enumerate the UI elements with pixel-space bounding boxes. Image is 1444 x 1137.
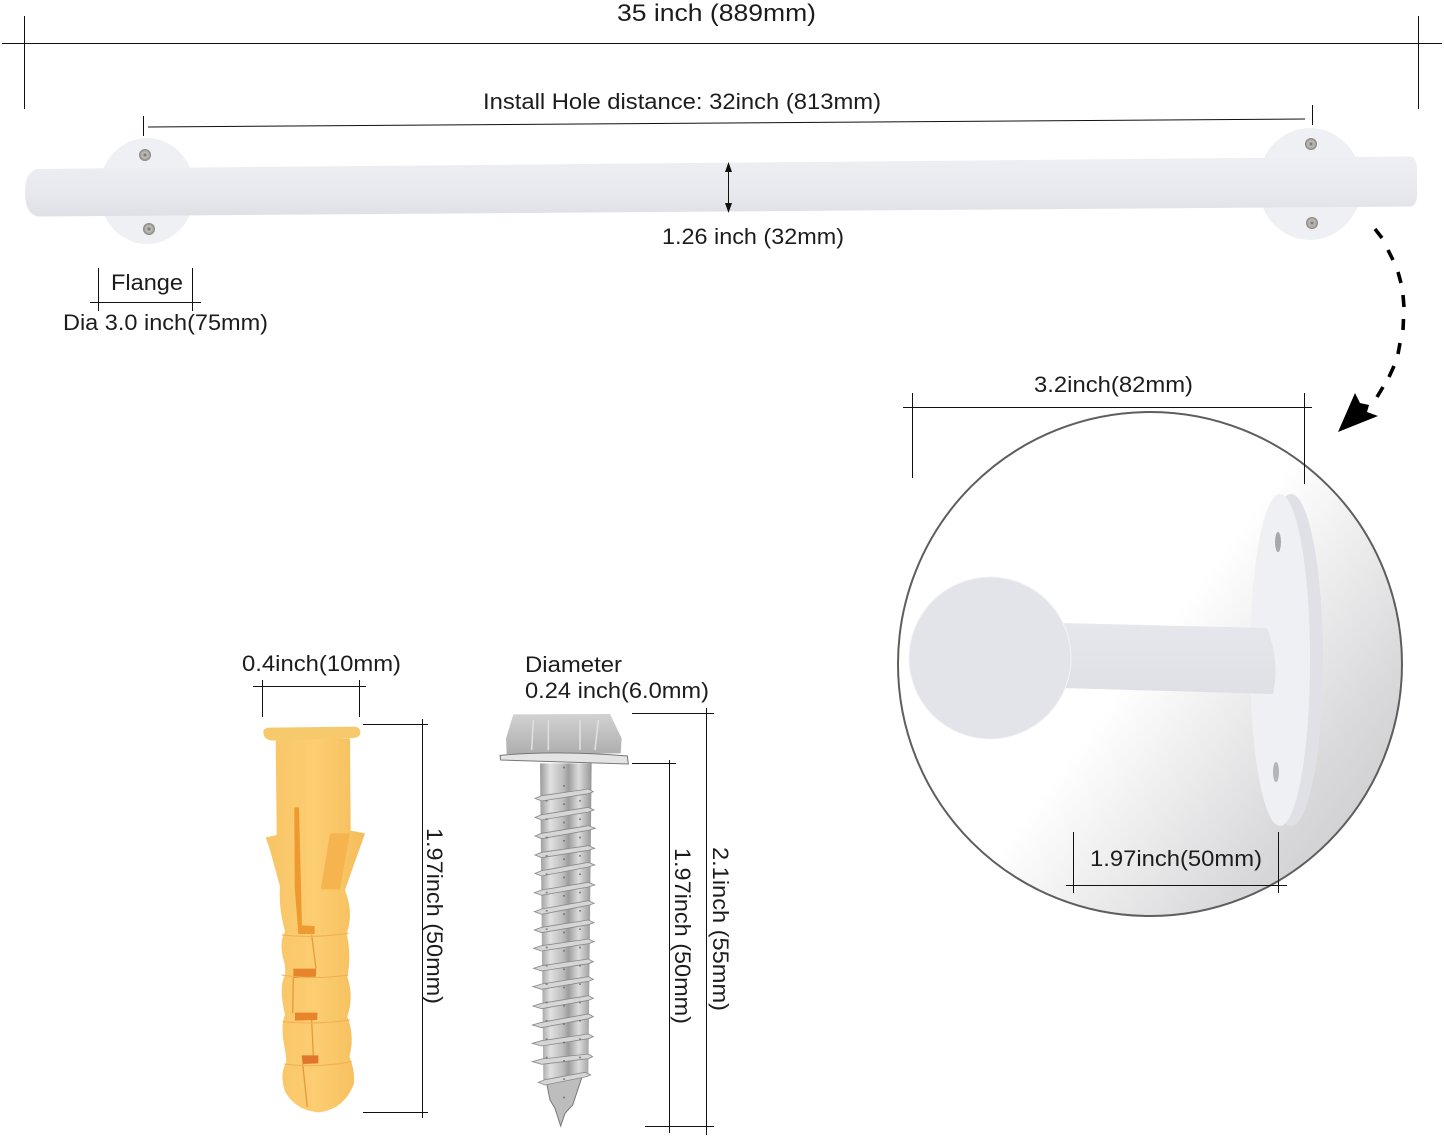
rail end cap: [909, 577, 1071, 739]
label: anchor length: 1.97inch (50mm): [422, 828, 447, 1004]
detail circle: side view of bracket: [898, 412, 1402, 916]
support stem: [1060, 623, 1275, 694]
screw hex head: [506, 714, 622, 754]
right flange: [1258, 128, 1362, 240]
install hole distance dimension: [144, 89, 1312, 136]
dashed arrow to detail view: [1338, 229, 1404, 432]
handrail product: [25, 128, 1417, 244]
screw thread texture: [547, 767, 580, 1100]
screw threads: [532, 789, 595, 1085]
screw diameter label: Diameter: [525, 652, 622, 677]
screw hex facets: [532, 720, 598, 750]
screw diameter label: [525, 652, 709, 703]
flange edge: [1259, 494, 1323, 826]
label: install hole distance: Install Hole distance: 32inch (813mm): [483, 89, 881, 114]
label: screw total length: 2.1inch (55mm): [708, 847, 733, 1011]
screw: [500, 714, 628, 1126]
tube diameter dimension: [662, 162, 844, 249]
screw shaft: [540, 763, 592, 1083]
anchor slots: [293, 807, 350, 1107]
flange face: [1250, 494, 1310, 826]
label: tube diameter: 1.26 inch (32mm): [662, 224, 844, 249]
screw flange: [500, 753, 628, 764]
rail tube: [25, 156, 1417, 216]
anchor ribs: [282, 933, 352, 1066]
label: anchor width: 0.4inch(10mm): [242, 651, 401, 676]
screw tip: [546, 1075, 583, 1126]
label: overall length: 35 inch (889mm): [617, 0, 816, 27]
label: screw diameter: 0.24 inch(6.0mm): [525, 678, 709, 703]
wall anchor: [263, 727, 365, 1112]
label: stem length: 1.97inch(50mm): [1090, 846, 1262, 871]
left flange: [99, 138, 195, 244]
label: flange: Flange: [111, 270, 183, 295]
label: bracket projection: 3.2inch(82mm): [1034, 372, 1193, 397]
anchor head: [263, 727, 360, 741]
anchor body: [266, 738, 365, 1112]
label: screw thread length: 1.97inch (50mm): [670, 848, 695, 1024]
flange diameter dimension: [63, 268, 268, 335]
label: flange diameter: Dia 3.0 inch(75mm): [63, 310, 268, 335]
